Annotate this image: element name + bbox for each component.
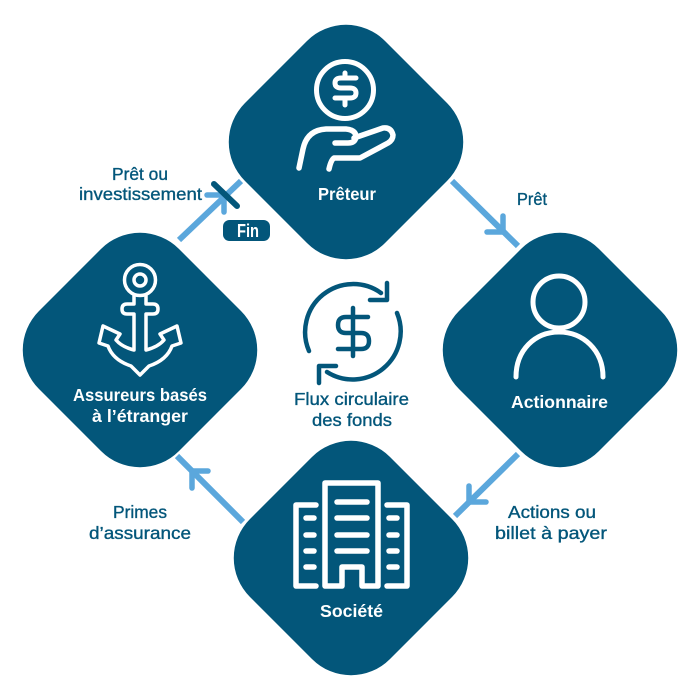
label: Société: Société [320,601,383,621]
label: Actions ou billet à payer: Actions ou [508,502,596,522]
label: Primes d'assurance: Primes [113,502,167,522]
label: Actions ou billet à payer [495,502,607,543]
label: Primes d'assurance [89,502,191,543]
icon: person [516,276,603,377]
node: Assureurs basés à l'étranger [0,210,280,490]
label: Flux circulaire des fonds: des fonds [312,410,392,430]
label: Flux circulaire des fonds: Flux circulaire [294,389,409,409]
end marker: cross bar [214,184,237,206]
label: Assureurs basés à l'étranger: Assureurs basés [73,385,207,405]
arrow: prêteur to actionnaire [452,181,518,246]
icon: circular dollar flow [305,283,401,383]
icon: anchor [99,264,181,375]
label: Actionnaire: Actionnaire [511,392,608,412]
node: Société [211,418,491,698]
label: Prêteur: Prêteur [318,184,376,204]
arrow: assureurs to prêteur [179,181,241,240]
icon: hand holding coin [299,62,393,169]
label: Prêt ou investissement [79,164,202,204]
arrow: société to assureurs [177,456,243,522]
icon: office buildings [296,483,407,586]
node: Prêteur [206,2,486,282]
label: Prêt ou investissement: Prêt ou [112,164,168,184]
arrow: actionnaire to société [455,454,518,516]
label: Primes d'assurance: d’assurance [89,523,191,543]
badge: Fin: Fin [237,221,259,241]
label: Prêt ou investissement: investissement [79,184,202,204]
label: Flux circulaire des fonds [294,389,409,430]
label: Assureurs basés à l'étranger [73,385,207,426]
badge: Fin [223,220,270,241]
label: Actions ou billet à payer: billet à payer [495,523,607,543]
label: Assureurs basés à l'étranger: à l’étranger [92,406,188,426]
node: Actionnaire [420,210,700,490]
label: Prêt: Prêt [517,189,547,209]
